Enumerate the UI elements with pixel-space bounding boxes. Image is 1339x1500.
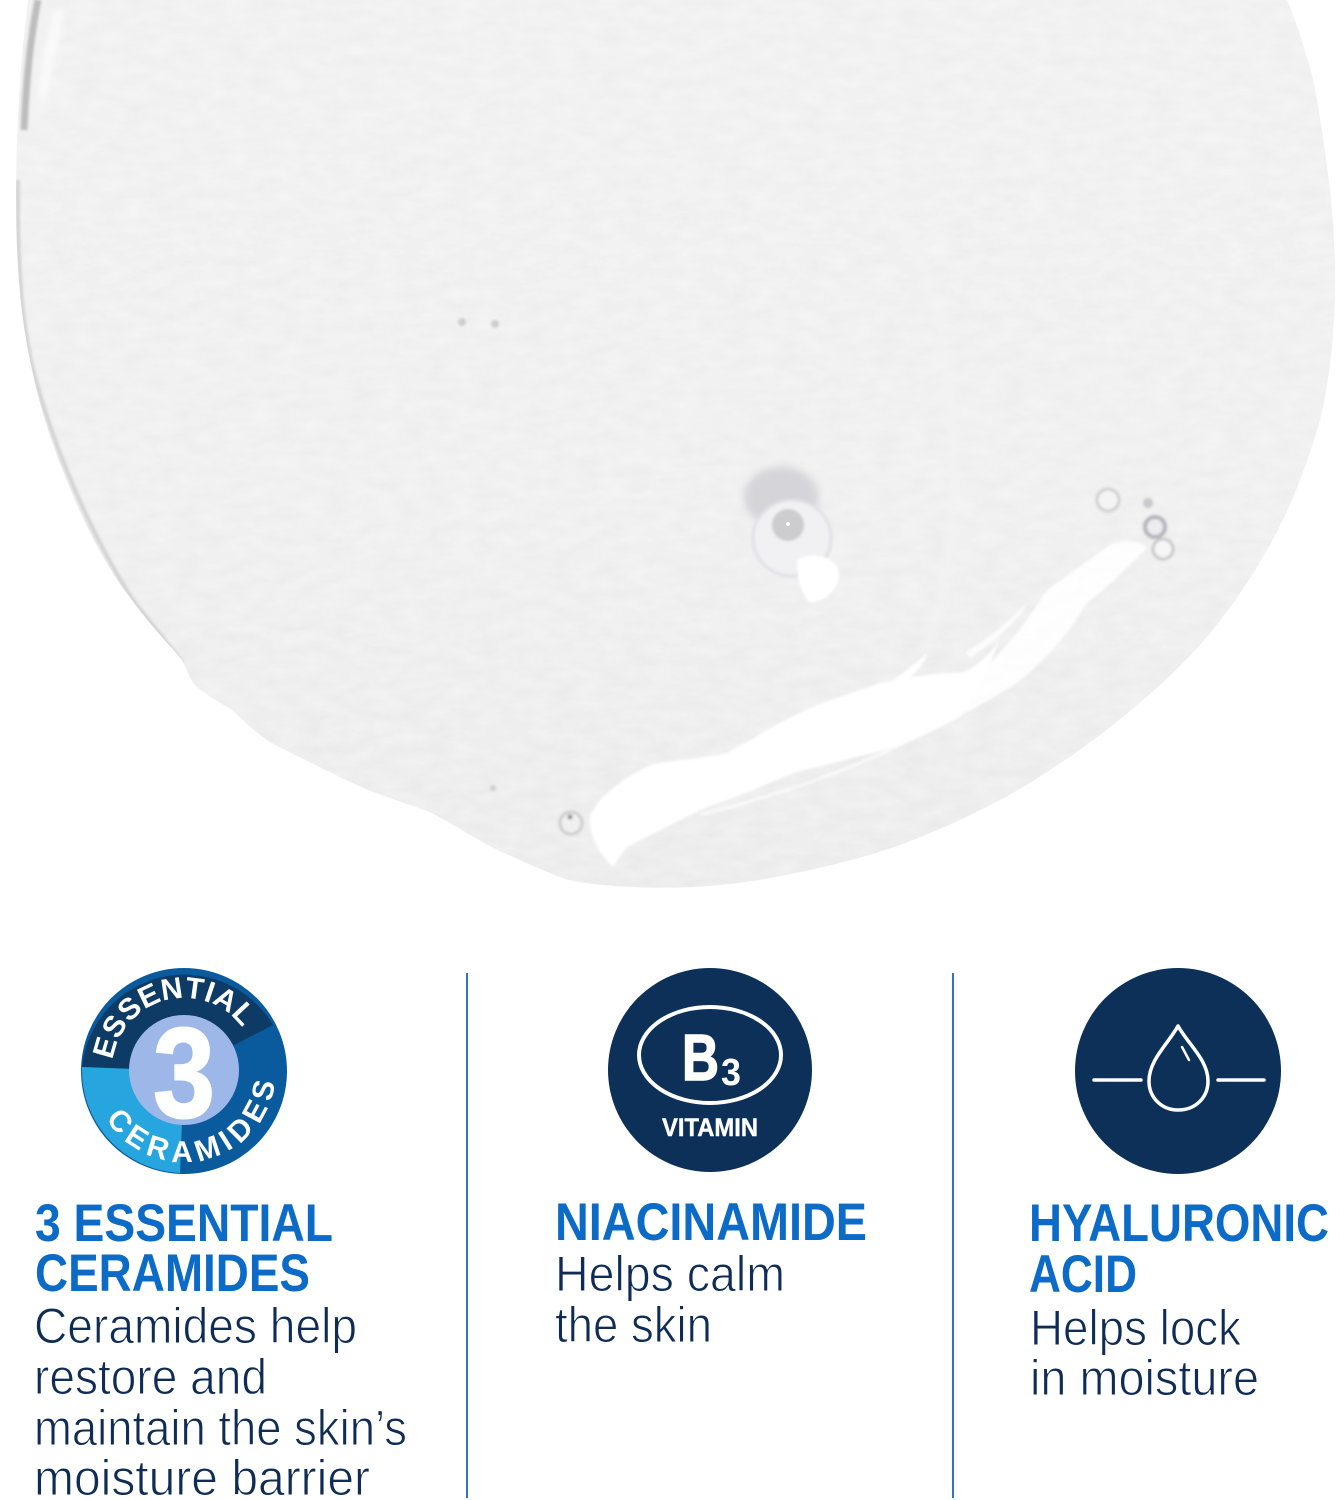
icon: 3 essential ceramides badge: CERAMIDES	[110, 1080, 274, 1162]
left edge shadow	[24, 0, 38, 130]
text: niacinamide description	[555, 1246, 785, 1353]
large bubble	[744, 467, 839, 603]
icon: 3 essential ceramides badge	[81, 968, 287, 1174]
text: hyaluronic acid description: in moisture	[1030, 1350, 1259, 1406]
faint inner fold	[800, 130, 955, 650]
divider left	[466, 973, 468, 1498]
heading: hyaluronic acid	[1029, 1194, 1329, 1304]
heading: 3 essential ceramides: 3 ESSENTIAL	[35, 1194, 333, 1253]
divider right	[952, 973, 954, 1498]
column: niacinamide	[555, 1193, 867, 1353]
heading: hyaluronic acid: ACID	[1029, 1245, 1137, 1304]
text: hyaluronic acid description: Helps lock	[1030, 1300, 1242, 1356]
column: hyaluronic acid	[1029, 1194, 1329, 1406]
text: niacinamide description: the skin	[555, 1297, 712, 1353]
gel swatch photo	[0, 0, 1339, 900]
specks	[458, 318, 499, 791]
icon: water drop	[1075, 968, 1281, 1174]
text: hyaluronic acid description	[1030, 1300, 1259, 1406]
icon: vitamin B3: VITAMIN	[662, 1114, 758, 1142]
small bubbles	[560, 489, 1173, 834]
icon: 3 essential ceramides badge: ESSENTIAL	[92, 977, 250, 1058]
text: niacinamide description: Helps calm	[555, 1246, 785, 1302]
text: ceramides description	[34, 1298, 407, 1500]
heading: 3 essential ceramides: CERAMIDES	[35, 1244, 310, 1303]
text: ceramides description: maintain the skin’s	[34, 1400, 407, 1456]
icon: vitamin B3	[608, 968, 812, 1172]
icon: vitamin B3: B	[682, 1021, 719, 1094]
specular streak	[590, 541, 1147, 867]
icon: vitamin B3: 3	[721, 1052, 741, 1094]
column: 3 essential ceramides	[34, 1194, 407, 1500]
heading: 3 essential ceramides	[35, 1194, 333, 1303]
text: ceramides description: restore and	[34, 1349, 267, 1405]
icon: 3 essential ceramides badge: 3	[153, 1002, 215, 1145]
heading: niacinamide: NIACINAMIDE	[555, 1193, 867, 1252]
text: ceramides description: Ceramides help	[34, 1298, 357, 1354]
